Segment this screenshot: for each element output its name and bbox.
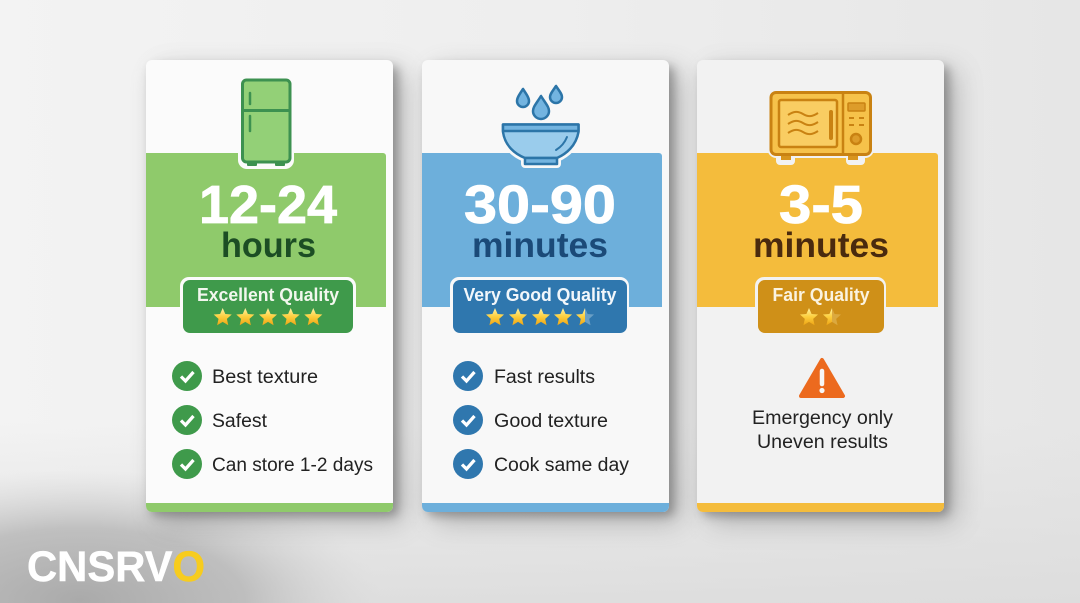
- logo: CNSRVO: CNSRVO: [27, 543, 205, 591]
- benefits list: Good texture: [494, 411, 608, 432]
- duration: 3-5 minutes: 3-5: [779, 175, 863, 235]
- duration: 30-90 minutes: 30-90: [464, 175, 616, 235]
- blue header band: [422, 153, 662, 307]
- benefits list: [172, 361, 373, 479]
- benefits list: Cook same day: [494, 455, 630, 476]
- rating: five stars: [214, 308, 322, 325]
- duration: 3-5 minutes: [753, 175, 889, 265]
- panel: cold water method: [422, 60, 681, 522]
- duration: 30-90 minutes: [464, 175, 616, 265]
- duration: 12-24 hours: [199, 175, 337, 265]
- bottom accent bar: [697, 503, 944, 512]
- rating: one and a half stars: [800, 308, 841, 325]
- notes: Emergency only: [752, 408, 894, 429]
- duration: 30-90 minutes: minutes: [472, 226, 608, 265]
- duration: 3-5 minutes: minutes: [753, 226, 889, 265]
- green header band: [146, 153, 386, 307]
- duration: 12-24 hours: hours: [221, 226, 316, 265]
- duration: 12-24 hours: 12-24: [199, 175, 337, 235]
- rating: four and a half stars: [486, 308, 594, 325]
- icon: microwave: [768, 89, 874, 165]
- icon: refrigerator: [238, 76, 294, 169]
- badge: very good quality: [450, 277, 629, 335]
- icon: bowl with water drops: [503, 86, 578, 164]
- notes: [752, 408, 894, 453]
- badge: fair quality: Fair Quality: [772, 285, 870, 305]
- benefits list: Safest: [212, 411, 268, 432]
- badge: excellent quality: [180, 277, 356, 335]
- bottom accent bar: [146, 503, 393, 512]
- badge: very good quality: Very Good Quality: [464, 285, 616, 305]
- notes: Uneven results: [757, 432, 888, 453]
- badge: excellent quality: Excellent Quality: [197, 285, 339, 305]
- benefits list: Best texture: [212, 367, 318, 388]
- panel: microwave method: [697, 60, 956, 522]
- benefits list: [453, 361, 630, 479]
- badge: fair quality: [755, 277, 886, 335]
- bottom accent bar: [422, 503, 669, 512]
- icon: warning triangle: [801, 360, 843, 396]
- yellow header band: [697, 153, 938, 307]
- benefits list: Can store 1-2 days: [212, 455, 373, 476]
- panel: refrigerator method: [146, 60, 405, 522]
- benefits list: Fast results: [494, 367, 595, 388]
